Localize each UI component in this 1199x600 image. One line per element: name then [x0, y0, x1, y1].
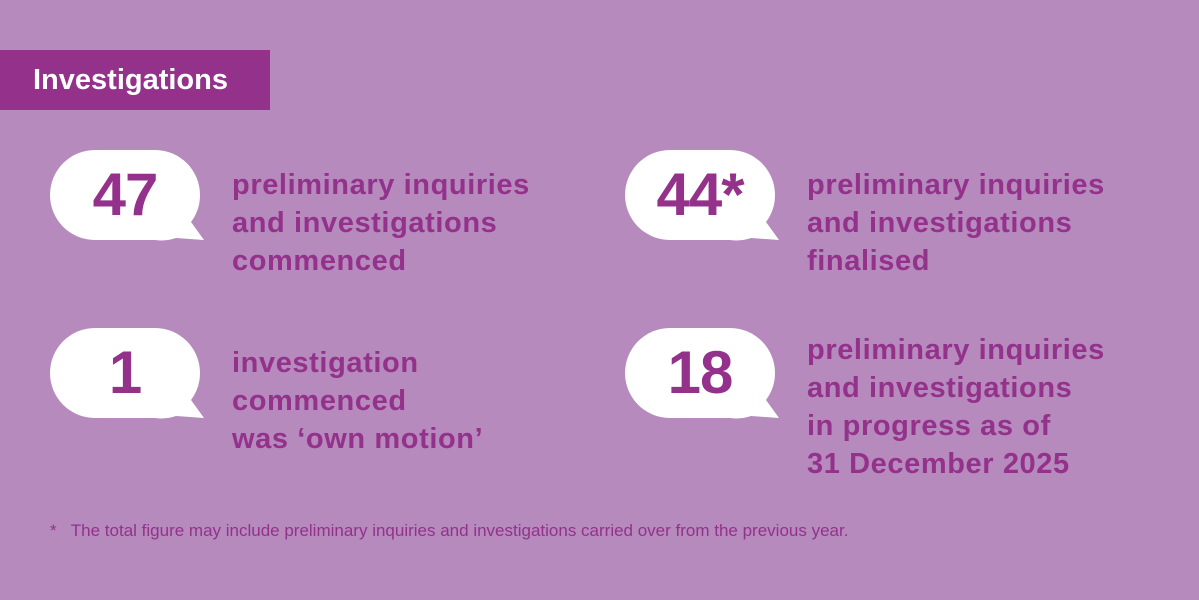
- text: 44 description: and investigations: [807, 207, 1072, 239]
- text: 44 description: preliminary inquiries: [807, 169, 1105, 201]
- text: 18 description: and investigations: [807, 372, 1072, 404]
- text: 18 description: in progress as of: [807, 410, 1051, 442]
- text: 18 description: 31 December 2025: [807, 448, 1070, 480]
- bubble: 47: 47: [93, 161, 157, 228]
- bubble: 18: [625, 328, 779, 418]
- text: 1 description: was ‘own motion’: [232, 423, 483, 455]
- text: 44 description: [807, 169, 1105, 277]
- text: 1 description: investigation: [232, 347, 419, 379]
- stat: 44* finalised: [625, 150, 1105, 277]
- footnote: * The total figure may include preliminary inquiries and investigations carried over from the previous year.: [50, 521, 848, 540]
- text: 18 description: preliminary inquiries: [807, 334, 1105, 366]
- text: 1 description: [232, 347, 483, 455]
- stat: 47 commenced: [50, 150, 530, 277]
- stat: 1 own motion: [50, 328, 483, 455]
- bubble: 1: [50, 328, 204, 418]
- text: 44 description: finalised: [807, 245, 930, 277]
- text: 18 description: [807, 334, 1105, 480]
- text: 1 description: commenced: [232, 385, 407, 417]
- text: 47 description: preliminary inquiries: [232, 169, 530, 201]
- text: 47 description: and investigations: [232, 207, 497, 239]
- bubble: 18: 18: [668, 339, 732, 406]
- text: 47 description: commenced: [232, 245, 407, 277]
- stat: 18 in progress: [625, 328, 1105, 480]
- text: 47 description: [232, 169, 530, 277]
- header: Investigations: Investigations: [33, 64, 228, 96]
- bubble: 44*: 44*: [656, 161, 744, 228]
- bubble: 44*: [625, 150, 779, 240]
- bubble: 47: [50, 150, 204, 240]
- bubble: 1: 1: [109, 339, 141, 406]
- header: Investigations: [0, 50, 270, 110]
